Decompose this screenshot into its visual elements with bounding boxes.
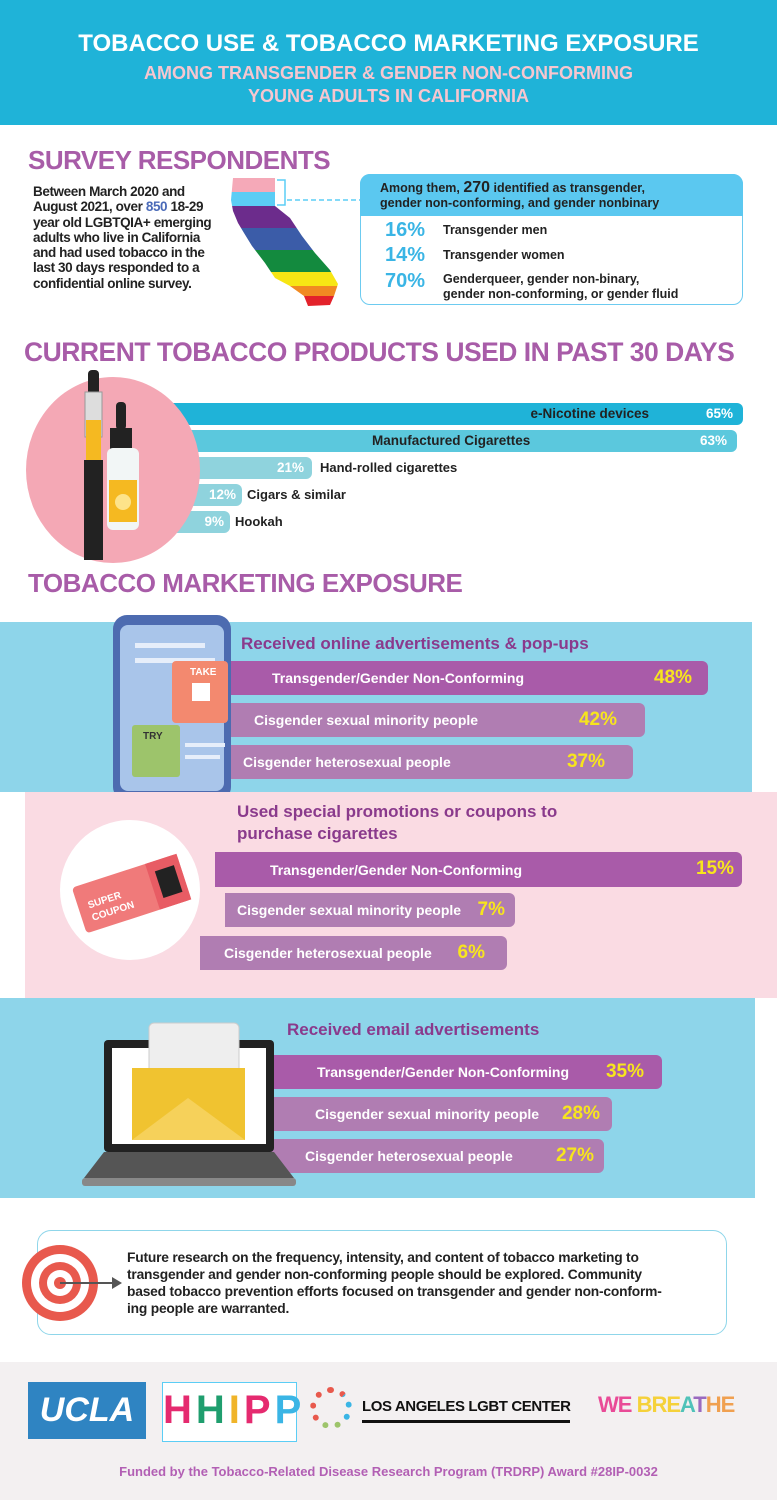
panel: promotions and coupons <box>25 792 777 998</box>
panel: online advertisements: 37% <box>567 751 605 772</box>
icon: super coupon: COUPON <box>91 900 136 924</box>
panel: email advertisements: Cisgender sexual minority people <box>315 1106 539 1122</box>
bar chart: tobacco products: 63% <box>700 433 727 448</box>
icon: super coupon: SUPER <box>87 890 124 911</box>
bar chart: tobacco products: 9% <box>204 514 224 529</box>
text: survey description: last 30 days responded to a <box>33 260 199 275</box>
text: ing people are warranted. <box>127 1301 289 1316</box>
bar chart: tobacco products: 12% <box>209 487 236 502</box>
heading: Used special promotions or coupons to <box>237 802 557 821</box>
panel: online advertisements: 42% <box>579 709 617 730</box>
funding text: Funded by the Tobacco-Related Disease Research Program (TRDRP) Award #28IP-0032 <box>119 1464 658 1479</box>
panel: gender identity stats: Transgender women <box>443 248 565 262</box>
text: survey description: confidential online survey. <box>33 276 191 291</box>
icon: rainbow california map <box>231 178 360 306</box>
icon: target with dart <box>22 1245 122 1321</box>
panel: online advertisements: Cisgender sexual minority people <box>254 712 478 728</box>
bar chart: tobacco products: e-Nicotine devices <box>530 406 649 421</box>
panel: email advertisements: 27% <box>556 1145 594 1166</box>
title: TOBACCO USE & TOBACCO MARKETING EXPOSURE <box>78 30 699 57</box>
stats header <box>360 174 743 216</box>
panel: promotions and coupons: Cisgender sexual minority people <box>237 902 461 918</box>
text: transgender and gender non-conforming people should be explored. Community <box>127 1267 642 1282</box>
stats header: Among them, 270 identified as transgender, <box>380 179 645 196</box>
header banner <box>0 0 777 125</box>
heading: Received email advertisements <box>287 1020 539 1039</box>
panel: gender identity stats: Transgender men <box>443 223 547 237</box>
bar chart: tobacco products: Manufactured Cigarettes <box>372 433 530 448</box>
logo: UCLA <box>28 1382 146 1439</box>
logo: LA LGBT Center: LOS ANGELES LGBT CENTER <box>362 1398 571 1415</box>
subtitle: AMONG TRANSGENDER & GENDER NON-CONFORMING <box>144 63 633 83</box>
heading: tobacco marketing exposure: TOBACCO MARKETING EXPOSURE <box>28 568 462 598</box>
panel: promotions and coupons: 7% <box>478 899 505 920</box>
bars: Transgender/Gender Non-Conforming <box>270 862 522 878</box>
panel: online advertisements: Cisgender heterosexual people <box>243 754 451 770</box>
icon: smartphone with ads: TAKE <box>190 667 217 678</box>
text: survey description: August 2021, over 850 18-29 <box>33 199 203 214</box>
logo: UCLA: UCLA <box>40 1391 134 1429</box>
text: survey description: Between March 2020 and <box>33 184 185 199</box>
bar chart: tobacco products <box>173 403 743 533</box>
icon: vape pen and e-liquid bottle <box>26 370 200 563</box>
panel: promotions and coupons: Cisgender heterosexual people <box>224 945 432 961</box>
heading: survey respondents: SURVEY RESPONDENTS <box>28 145 330 175</box>
panel: gender identity stats: 16% <box>385 219 425 241</box>
panel: gender identity stats: Genderqueer, gender non-binary, <box>443 272 639 286</box>
panel: gender identity stats: 14% <box>385 244 425 266</box>
panel: promotions and coupons: 6% <box>458 942 485 963</box>
heading: purchase cigarettes <box>237 824 398 843</box>
panel: gender identity stats: 70% <box>385 270 425 292</box>
text <box>127 1250 662 1316</box>
text: based tobacco prevention efforts focused on transgender and gender non-conform- <box>127 1284 662 1299</box>
text: survey description: and had used tobacco in the <box>33 245 204 260</box>
bar chart: tobacco products: Cigars & similar <box>247 487 346 502</box>
panel: gender identity stats <box>360 174 743 305</box>
bars <box>220 661 708 695</box>
bars: 35% <box>606 1061 644 1082</box>
bar chart: tobacco products: Hand-rolled cigarettes <box>320 460 457 475</box>
panel: gender identity stats: gender non-conforming, or gender fluid <box>443 287 678 301</box>
stat rows <box>385 219 678 301</box>
panel: email advertisements: 28% <box>562 1103 600 1124</box>
text: Future research on the frequency, intensity, and content of tobacco marketing to <box>127 1250 639 1265</box>
logo: HHIPP: HHIPP <box>163 1388 305 1432</box>
bars: Transgender/Gender Non-Conforming <box>272 670 524 686</box>
logo: HHIPP <box>162 1382 297 1442</box>
icon: laptop with envelope <box>82 1022 296 1186</box>
footer <box>0 1362 777 1500</box>
bars: Transgender/Gender Non-Conforming <box>317 1064 569 1080</box>
bars <box>265 1055 662 1089</box>
stats header: gender non-conforming, and gender nonbinary <box>380 196 659 210</box>
panel: online advertisements <box>0 622 752 792</box>
icon: smartphone with ads: TRY <box>143 731 163 742</box>
heading: current tobacco products: CURRENT TOBACCO PRODUCTS USED IN PAST 30 DAYS <box>24 337 734 367</box>
heading <box>237 802 557 843</box>
bars: 48% <box>654 667 692 688</box>
heading: Received online advertisements & pop-ups <box>241 634 589 653</box>
text: survey description: year old LGBTQIA+ emerging <box>33 215 211 230</box>
panel: email advertisements: Cisgender heterosexual people <box>305 1148 513 1164</box>
bar chart: tobacco products: Hookah <box>235 514 283 529</box>
bars: 15% <box>696 858 734 879</box>
text: survey description: adults who live in California <box>33 230 200 245</box>
subtitle <box>144 63 633 106</box>
icon: super coupon <box>60 820 200 960</box>
bar chart: tobacco products: 21% <box>277 460 304 475</box>
panel: email advertisements <box>0 998 755 1198</box>
logo: We Breathe: WE BREATHE <box>598 1392 734 1417</box>
callout: conclusion <box>37 1230 727 1335</box>
icon: smartphone with ads <box>113 615 231 792</box>
bars <box>215 852 742 887</box>
logo: LA LGBT Center <box>310 1387 571 1428</box>
bar chart: tobacco products: 65% <box>706 406 733 421</box>
subtitle: YOUNG ADULTS IN CALIFORNIA <box>248 86 529 106</box>
text: survey description <box>33 184 211 291</box>
